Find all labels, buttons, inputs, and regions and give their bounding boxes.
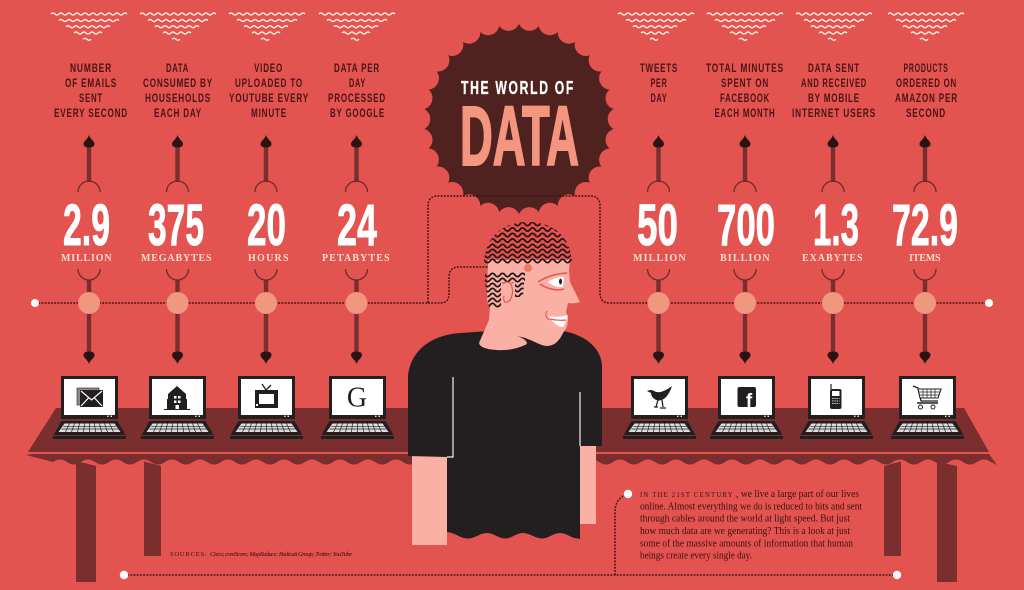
unit labels: EXABYTES <box>802 253 864 264</box>
labels: households: EACH DAY <box>154 106 202 120</box>
head <box>479 260 580 350</box>
big numbers: 700 <box>717 193 775 258</box>
laptop: email <box>53 376 126 439</box>
labels: google: DATA PER <box>334 61 380 75</box>
labels: emails: NUMBER <box>70 61 112 75</box>
ear <box>503 282 512 302</box>
labels: amazon: SECOND <box>906 106 946 120</box>
labels: facebook: EACH MONTH <box>714 106 776 120</box>
labels: facebook: FACEBOOK <box>720 91 770 105</box>
labels: amazon <box>895 61 958 120</box>
labels: youtube: VIDEO <box>254 61 283 75</box>
labels: mobile: BY MOBILE <box>808 91 860 105</box>
icon: bird <box>647 386 672 408</box>
big numbers: 72.9 <box>892 193 958 258</box>
labels: mobile <box>792 61 876 120</box>
title badge <box>408 7 630 231</box>
icon: phone <box>830 384 842 409</box>
unit labels: BILLION <box>720 253 771 264</box>
arrows and nodes <box>31 135 993 579</box>
labels: emails: OF EMAILS <box>65 76 117 90</box>
labels: amazon: ORDERED ON <box>896 76 957 90</box>
labels: mobile: AND RECEIVED <box>801 76 867 90</box>
icon: tv <box>255 384 278 408</box>
labels: emails: SENT <box>79 91 103 105</box>
labels: mobile: DATA SENT <box>808 61 860 75</box>
table valance <box>26 454 997 465</box>
icon: facebook: f <box>746 391 753 412</box>
labels: amazon: AMAZON PER <box>895 91 958 105</box>
unit labels: MILLION <box>61 253 113 264</box>
laptop: facebook <box>710 376 783 439</box>
labels: facebook <box>706 61 784 120</box>
laptop: twitter <box>623 376 696 439</box>
big numbers: 1.3 <box>813 193 859 258</box>
hair top <box>480 222 580 263</box>
labels: tweets: PER <box>650 76 668 90</box>
laptop: phone <box>800 376 873 439</box>
unit labels: ITEMS <box>909 253 942 264</box>
mouth <box>546 311 568 327</box>
big numbers: 20 <box>247 193 286 258</box>
labels: facebook: SPENT ON <box>721 76 769 90</box>
unit labels: PETABYTES <box>322 253 391 264</box>
labels: google: BY GOOGLE <box>330 106 385 120</box>
hair side <box>485 272 525 308</box>
icon: cart <box>913 386 941 409</box>
labels: youtube: YOUTUBE EVERY <box>229 91 309 105</box>
labels: mobile: INTERNET USERS <box>792 106 876 120</box>
labels: emails <box>54 61 128 120</box>
arms <box>412 440 596 545</box>
dotted connector lines <box>35 196 989 575</box>
table legs <box>76 462 957 582</box>
labels: emails: EVERY SECOND <box>54 106 128 120</box>
intro paragraph: through cables around the world at light speed. But just <box>640 514 850 525</box>
temple dot <box>524 264 532 272</box>
wavy decorations <box>51 13 964 40</box>
laptop: cart <box>891 376 964 439</box>
unit labels: MILLION <box>633 253 687 264</box>
title line 1: THE WORLD OF <box>461 78 575 98</box>
intro paragraph: how much data are we generating? This is a look at just <box>640 526 850 537</box>
icon: house <box>164 386 190 410</box>
big numbers: 50 <box>637 193 678 258</box>
icon: envelope <box>77 388 103 407</box>
labels: amazon: PRODUCTS <box>904 61 948 75</box>
unit labels <box>61 253 942 264</box>
intro paragraph <box>640 489 862 562</box>
labels: google: PROCESSED <box>328 91 386 105</box>
labels: households: CONSUMED BY <box>143 76 213 90</box>
eye <box>538 273 567 290</box>
intro paragraph: online. Almost everything we do is reduced to bits and sent <box>640 502 862 512</box>
labels: tweets <box>640 61 678 105</box>
laptop: house <box>141 376 214 439</box>
person <box>408 222 602 545</box>
laptop: google <box>321 376 394 439</box>
labels: tweets: TWEETS <box>640 61 678 75</box>
labels: tweets: DAY <box>650 91 668 105</box>
unit labels: HOURS <box>248 253 290 264</box>
labels: households: DATA <box>166 61 189 75</box>
unit labels: MEGABYTES <box>141 253 213 264</box>
icon: google G: G <box>347 382 367 414</box>
sources: SOURCES: Cisco; comScore; MapReduce; Radicati Group; Twitter; YouTube <box>170 551 352 558</box>
labels: households: HOUSEHOLDS <box>145 91 211 105</box>
labels: google <box>328 61 386 120</box>
labels: households <box>143 61 213 120</box>
laptop: tv <box>230 376 303 439</box>
big numbers: 375 <box>148 193 204 258</box>
labels: facebook: TOTAL MINUTES <box>706 61 784 75</box>
labels: youtube: MINUTE <box>251 106 287 120</box>
intro paragraph: IN THE 21ST CENTURY , we live a large part of our lives <box>640 489 859 500</box>
table top <box>28 408 989 452</box>
black shirt <box>408 331 602 539</box>
shirt highlights <box>447 377 580 457</box>
intro paragraph: beings create every single day. <box>640 550 752 562</box>
big numbers <box>63 193 958 258</box>
intro paragraph: some of the massive amounts of information that human <box>640 538 854 549</box>
labels: youtube: UPLOADED TO <box>235 76 303 90</box>
big numbers: 24 <box>337 193 377 258</box>
big numbers: 2.9 <box>63 193 110 258</box>
title line 2: DATA <box>460 89 579 183</box>
labels: youtube <box>229 61 309 120</box>
labels: google: DAY <box>349 76 366 90</box>
